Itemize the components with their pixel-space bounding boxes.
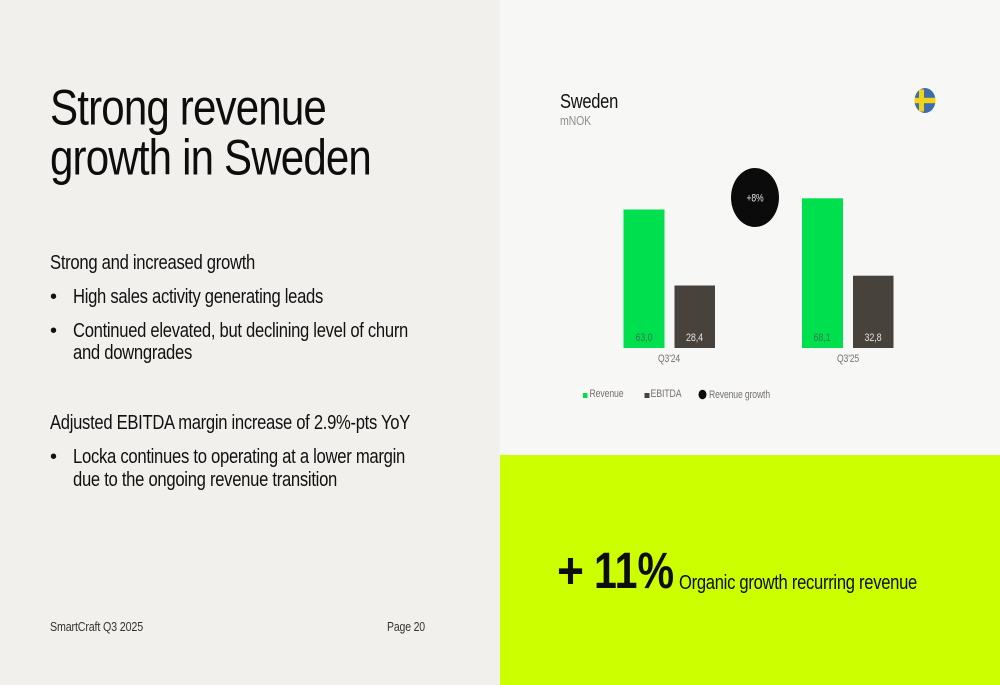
- text block: growth commentary: and downgrades: [73, 342, 192, 364]
- legend: [583, 388, 770, 401]
- text block: growth commentary: Strong and increased growth: [50, 252, 255, 274]
- legend item: Revenue growth: [698, 389, 770, 401]
- title: growth in Sweden: [50, 130, 371, 186]
- text block: growth commentary: •: [50, 286, 57, 308]
- text block: EBITDA commentary: [50, 412, 410, 491]
- chart heading: Sweden: [560, 91, 618, 113]
- panel: green highlight background: [500, 455, 1000, 685]
- highlight: organic growth statistic: [557, 542, 917, 599]
- bar: Q3'25 EBITDA: 32,8: [864, 332, 882, 344]
- text block: EBITDA commentary: •: [50, 446, 57, 468]
- icon: Swedish flag: [914, 88, 936, 113]
- panel: left background: [0, 0, 500, 685]
- bar: Q3'25 revenue: [802, 198, 843, 348]
- callout: revenue growth: [731, 168, 779, 227]
- legend item: EBITDA: EBITDA: [650, 388, 682, 400]
- legend item: Revenue: Revenue: [590, 388, 624, 400]
- text block: growth commentary: [50, 252, 408, 364]
- footer: company and period: SmartCraft Q3 2025: [50, 619, 143, 634]
- callout: revenue growth: +8%: [746, 192, 764, 204]
- bar: Q3'24 EBITDA: 28,4: [686, 332, 703, 344]
- axis label: Q3'25: Q3'25: [837, 353, 859, 365]
- text block: growth commentary: Continued elevated, but declining level of churn: [73, 320, 408, 342]
- title: [50, 80, 371, 186]
- footer: page number: Page 20: [387, 619, 425, 634]
- highlight label: Organic growth recurring revenue: [679, 571, 917, 594]
- text block: EBITDA commentary: Adjusted EBITDA margin increase of 2.9%-pts YoY: [50, 412, 410, 434]
- panel: chart background: [500, 0, 1000, 455]
- bar: Q3'25 revenue: 68,1: [814, 332, 831, 344]
- bar: Q3'25 EBITDA: [853, 276, 894, 348]
- bar chart: [624, 198, 894, 365]
- bar: Q3'24 revenue: [624, 210, 664, 348]
- big number: +: [557, 542, 584, 599]
- title: Strong revenue: [50, 80, 326, 136]
- legend item: Revenue: [583, 388, 624, 400]
- text block: EBITDA commentary: Locka continues to operating at a lower margin: [73, 446, 405, 468]
- text block: growth commentary: •: [50, 320, 57, 342]
- text block: EBITDA commentary: due to the ongoing revenue transition: [73, 469, 337, 491]
- chart unit label: mNOK: [560, 113, 591, 128]
- axis label: Q3'24: Q3'24: [658, 353, 680, 365]
- bar: Q3'24 EBITDA: [674, 286, 715, 348]
- text block: growth commentary: High sales activity generating leads: [73, 286, 323, 308]
- big number: 11%: [594, 542, 674, 599]
- bar: Q3'24 revenue: 63,0: [636, 332, 653, 344]
- legend item: Revenue growth: Revenue growth: [709, 389, 770, 401]
